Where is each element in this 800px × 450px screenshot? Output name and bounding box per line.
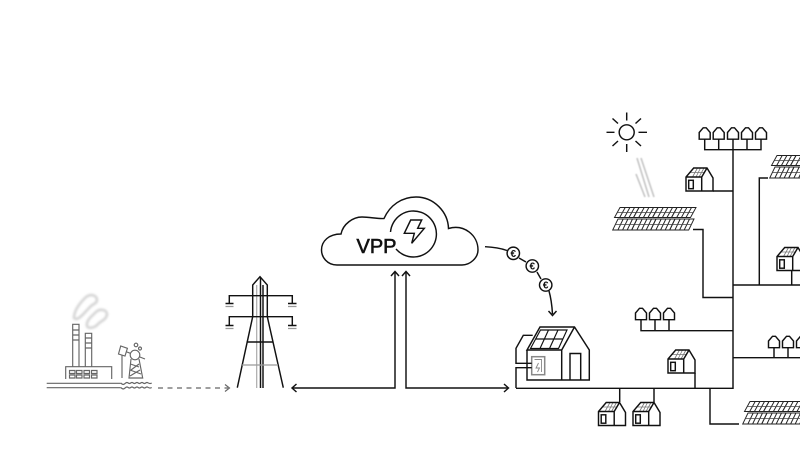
sun rays	[636, 158, 654, 197]
ground and water lines	[47, 382, 152, 389]
transmission tower	[226, 277, 296, 388]
VPP text: VPP	[356, 236, 397, 258]
euro coin: €	[530, 262, 536, 272]
dashed arrow	[158, 384, 230, 392]
power plant and oil pump	[47, 295, 152, 389]
euro coin: €	[543, 280, 549, 292]
sun	[606, 112, 647, 152]
lightning bolt icon	[404, 220, 424, 243]
right row of small houses	[768, 336, 800, 348]
lightning circle	[390, 211, 436, 257]
solar house	[598, 402, 626, 426]
left row of small houses	[636, 308, 674, 320]
top right solar array	[770, 156, 800, 178]
euro coin: €	[511, 249, 517, 260]
cloud with VPP label	[322, 197, 478, 265]
battery	[532, 357, 545, 375]
payment line	[485, 247, 556, 316]
top row of small houses	[699, 128, 766, 139]
main house with solar roof and battery	[516, 327, 589, 388]
cloud outline	[322, 197, 478, 265]
distribution grid lines	[516, 139, 800, 424]
large solar array	[613, 208, 696, 230]
solar house	[668, 350, 695, 373]
smoke	[74, 295, 107, 328]
solar house	[686, 168, 713, 191]
oil pump	[118, 343, 145, 378]
chimneys and factory building	[66, 324, 112, 379]
solar house	[633, 402, 660, 426]
solar house	[777, 248, 800, 270]
bottom right solar array	[743, 402, 800, 424]
euro payment flow	[485, 247, 556, 316]
power flow arrows	[292, 272, 508, 392]
